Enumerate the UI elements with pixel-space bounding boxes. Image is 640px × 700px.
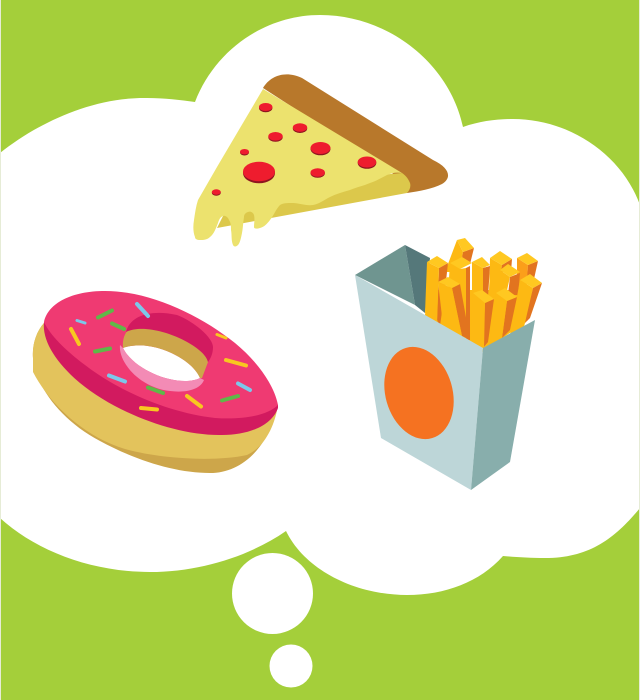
donut dough light	[33, 323, 278, 459]
donut icing	[44, 291, 278, 418]
icon: french fries	[355, 238, 542, 490]
donut hole icing front	[120, 345, 204, 392]
fry D	[472, 262, 483, 345]
thought bubble small	[270, 644, 312, 688]
box orange circle	[374, 339, 464, 447]
box inner back right	[405, 245, 430, 313]
pizza crust	[263, 74, 448, 193]
fry C	[446, 263, 469, 340]
pizza cheese	[193, 89, 402, 246]
fry G	[488, 270, 510, 312]
box side face	[471, 320, 535, 490]
back fry E	[489, 258, 502, 305]
donut hole inner wall	[123, 326, 208, 378]
fry H	[452, 284, 470, 340]
icon: donut	[33, 291, 278, 473]
fry I	[483, 299, 494, 348]
donut hole	[123, 345, 200, 381]
fries	[424, 238, 542, 352]
box inner back left	[355, 245, 415, 305]
donut hole icing back	[126, 313, 213, 362]
pepperoni shadows	[212, 104, 376, 196]
icon: pizza slice	[193, 74, 448, 246]
fry K	[523, 283, 542, 325]
fry B	[437, 263, 448, 326]
donut icing dark	[44, 322, 278, 435]
sprinkles	[71, 304, 250, 410]
fries filler	[424, 290, 528, 352]
pepperoni	[212, 103, 376, 195]
donut dough dark	[33, 323, 278, 473]
pizza underside	[217, 173, 410, 228]
back fry F	[517, 258, 528, 300]
box front face	[355, 275, 483, 490]
fry J	[502, 297, 517, 338]
back fry A	[445, 240, 463, 272]
thought bubble large	[232, 553, 313, 634]
